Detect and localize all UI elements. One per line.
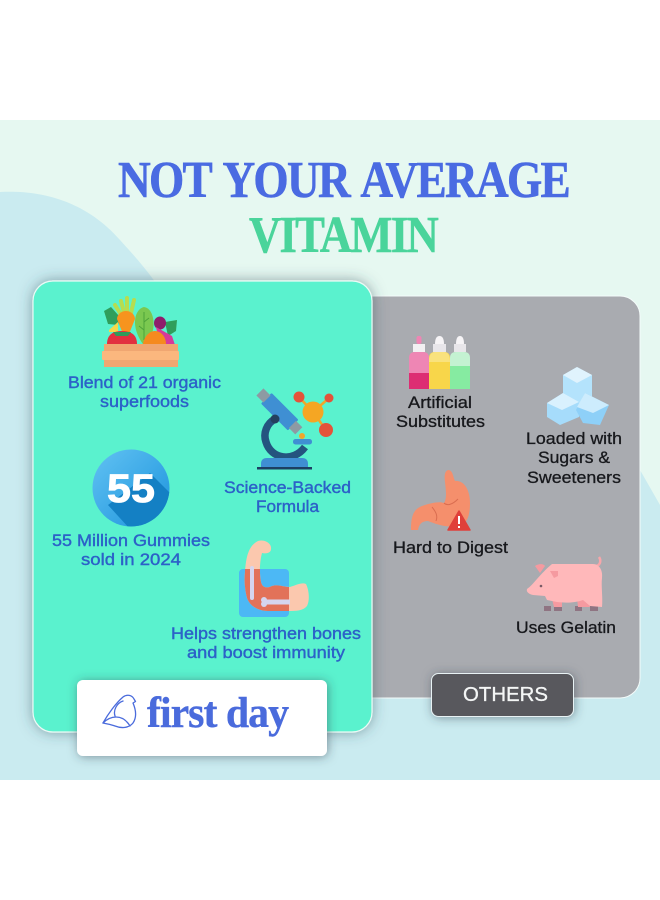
label: blend of 21 organic superfoods [68,374,221,411]
icon: 55 badge [92,450,170,526]
title [118,152,569,264]
label: 55 million gummies [52,532,210,569]
label: science-backed formula: Science-Backed [224,479,351,497]
others badge: OTHERS [463,684,548,706]
label: hard to digest: Hard to Digest [393,539,508,557]
label: loaded with sugars and sweeteners: Loaded with [526,430,622,448]
panel: others [360,296,640,698]
label: science-backed formula [224,479,351,516]
icon: stomach with warning [411,470,470,530]
icon: sugar cubes [547,367,609,425]
icon: bird [103,695,136,728]
icon: vegetable crate [102,298,179,367]
icon: dropper bottles [409,336,470,389]
background [0,120,660,780]
icon: 55 badge: 55 [107,467,155,511]
others badge [432,674,574,716]
label: helps strengthen bones: Helps strengthen bones [171,625,361,643]
label: loaded with sugars and sweeteners: Sugars & [538,449,610,467]
panel: first day [33,281,372,732]
wordmark: first day [147,690,289,737]
icon: arm and bone [239,540,309,617]
label: helps strengthen bones [171,625,361,662]
icon: pig [527,557,602,611]
title: VITAMIN [249,207,438,264]
label: artificial substitutes: Artificial [408,394,472,412]
label: artificial substitutes: Substitutes [396,413,485,431]
label: artificial substitutes [396,394,485,431]
label: 55 million gummies: 55 Million Gummies [52,532,210,550]
label: 55 million gummies: sold in 2024 [81,551,181,569]
label: helps strengthen bones: and boost immunity [187,644,346,662]
label: blend of 21 organic superfoods: Blend of 21 organic [68,374,221,392]
label: loaded with sugars and sweeteners: Sweeteners [527,469,621,487]
label: uses gelatin: Uses Gelatin [516,619,616,637]
label: science-backed formula: Formula [256,498,320,516]
logo card [77,680,327,756]
label: loaded with sugars and sweeteners [526,430,622,487]
icon: microscope and molecule [255,387,334,470]
title: NOT YOUR AVERAGE [118,152,569,209]
label: blend of 21 organic superfoods: superfoods [100,393,189,411]
